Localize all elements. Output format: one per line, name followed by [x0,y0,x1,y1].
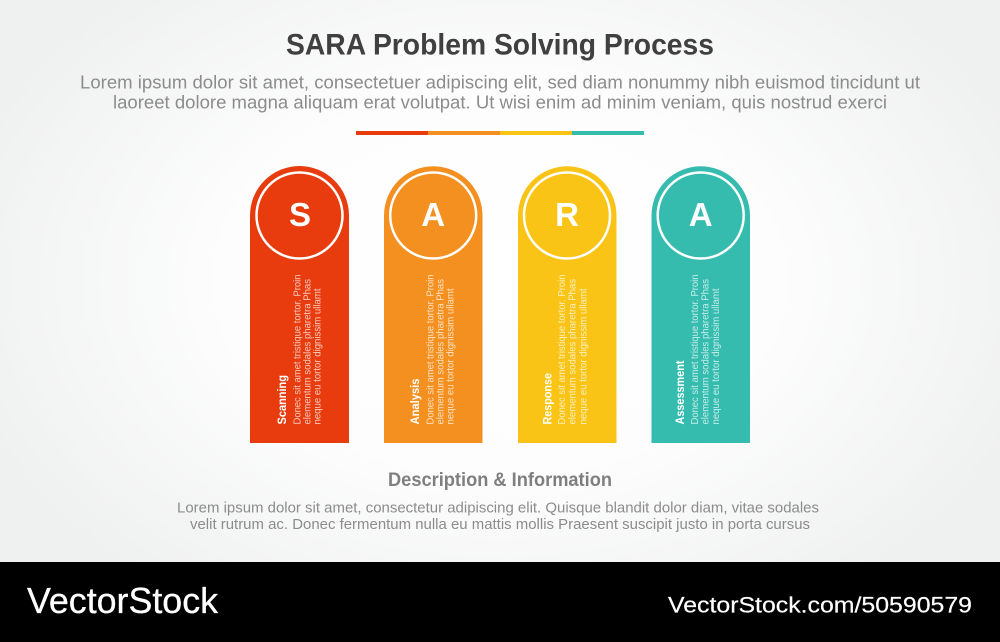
footer image id: VectorStock.com/50590579 [668,592,972,618]
body text: Scanning: Donec sit amet tristique tortor. Proin [292,274,304,424]
body text: Response: Donec sit amet tristique tortor. Proin [556,274,568,424]
title: SARA Problem Solving Process [286,28,714,62]
panel: Assessment [652,166,750,443]
description text: Lorem ipsum dolor sit amet, consectetur adipiscing elit. Quisque blandit dolor diam, vitae sodales [177,500,819,516]
body text: Analysis: elementum sodales pharetra Phas [434,279,446,424]
body text: Scanning [292,274,324,424]
letter R: R [555,196,579,233]
body text: Assessment [689,274,722,424]
panel: Analysis [384,166,482,443]
body text: Analysis: neque eu tortor dignissim ullamt [444,288,456,424]
panel: Scanning [250,166,349,443]
description text: velit rutrum ac. Donec fermentum nulla eu mattis mollis Praesent suscipit justo in porta cursus [190,517,810,533]
body text: Analysis [424,274,456,424]
four-colour divider [356,131,644,135]
letter A: A [689,196,713,233]
body text: Scanning: neque eu tortor dignissim ullamt [312,288,324,424]
body text: Response: elementum sodales pharetra Phas [566,279,578,424]
subtitle text: laoreet dolore magna aliquam erat volutpat. Ut wisi enim ad minim veniam, quis nostrud exerci [113,92,887,112]
body text: Assessment: Donec sit amet tristique tortor. Proin [689,274,701,424]
body text: Response: neque eu tortor dignissim ullamt [578,288,590,424]
letter S: S [289,196,311,233]
heading: Assessment: Assessment [673,360,687,424]
footer logo text: VectorStock [27,580,219,621]
panel: Response [518,166,616,443]
body text: Response [556,274,590,424]
subtitle text: Lorem ipsum dolor sit amet, consectetuer adipiscing elit, sed diam nonummy nibh euismod tincidunt ut [80,72,920,92]
description text [177,500,819,533]
heading: Scanning: Scanning [275,375,289,424]
body text: Assessment: neque eu tortor dignissim ullamt [710,288,722,424]
description heading: Description & Information [388,469,612,491]
body text: Assessment: elementum sodales pharetra Phas [700,279,712,424]
body text: Analysis: Donec sit amet tristique tortor. Proin [424,274,436,424]
subtitle text [80,72,920,112]
heading: Response: Response [540,373,554,424]
letter A: A [421,196,445,233]
heading: Analysis: Analysis [408,378,422,424]
body text: Scanning: elementum sodales pharetra Phas [302,279,314,424]
footer band [0,562,1000,642]
